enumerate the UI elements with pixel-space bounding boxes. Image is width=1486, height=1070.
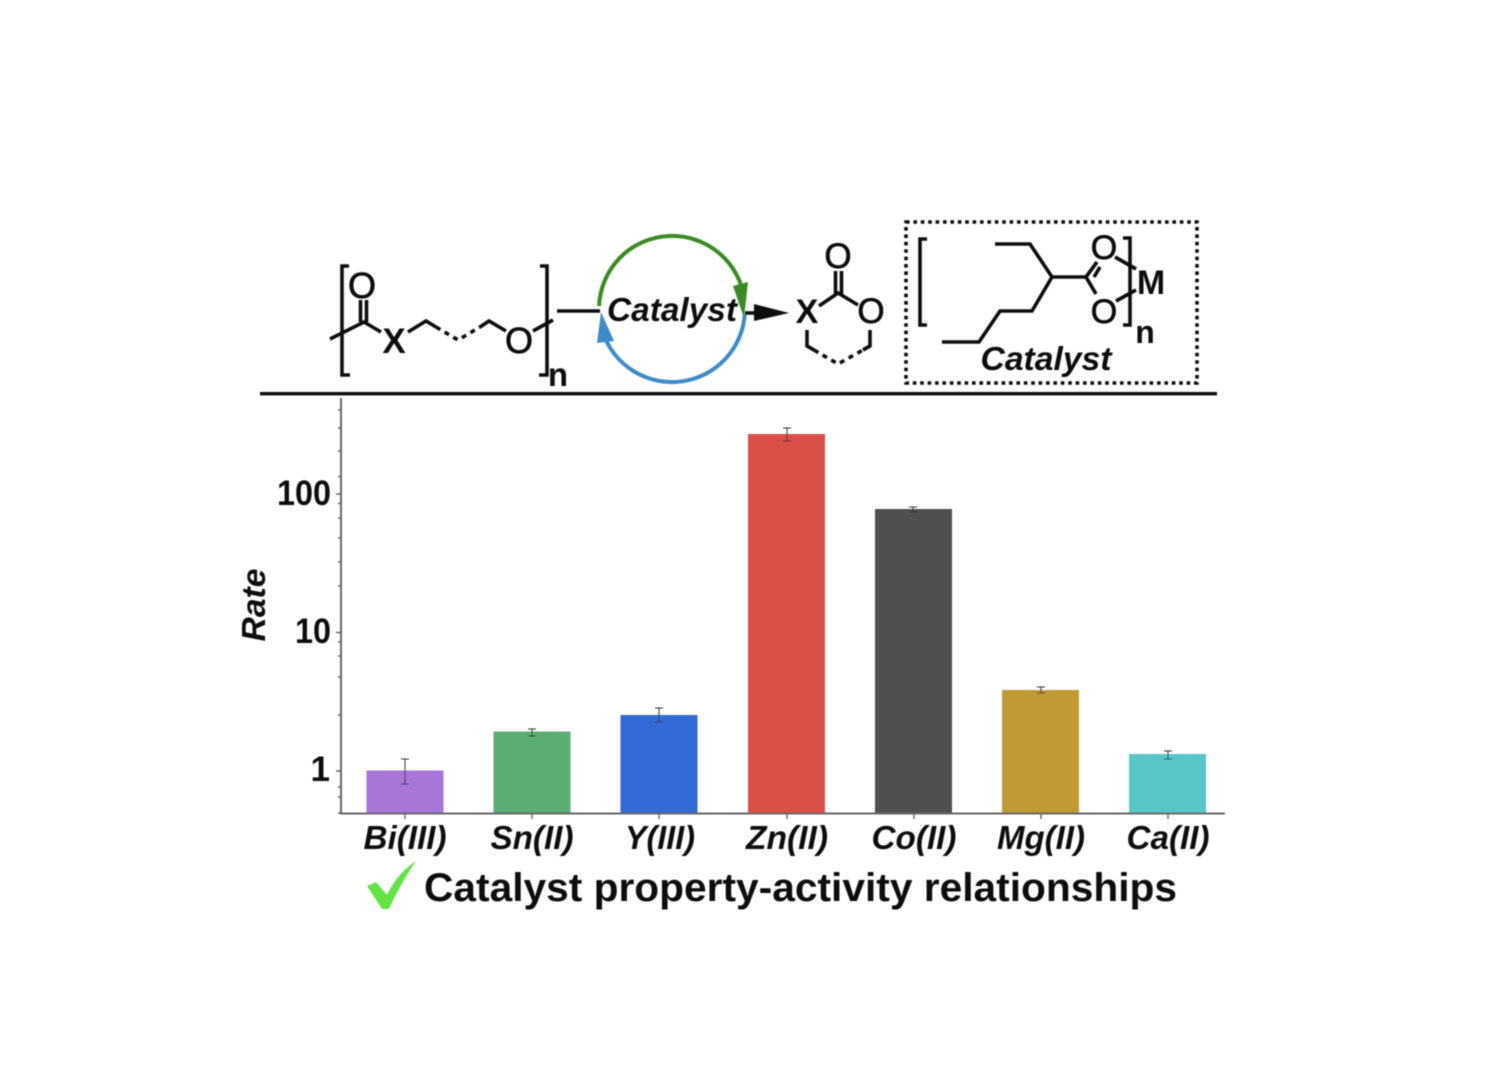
x axis labels: Ca(II) <box>1126 819 1210 856</box>
catalyst structure box: O <box>1091 229 1117 267</box>
x axis labels: Zn(II) <box>745 819 828 856</box>
cyclic product structure: X <box>796 293 819 331</box>
polymer structure: X <box>382 322 406 361</box>
catalyst structure box: M <box>1137 264 1165 302</box>
x axis labels: Mg(II) <box>997 819 1085 856</box>
catalyst structure box <box>906 222 1197 383</box>
bottom caption: Catalyst property-activity relationships <box>424 866 1177 910</box>
bar: Zn(II) <box>748 428 825 813</box>
bar chart <box>235 398 1225 856</box>
y axis title: Rate <box>235 568 272 642</box>
catalyst structure box: O <box>1091 293 1117 331</box>
cyclic product structure <box>796 237 885 364</box>
bar: Bi(III) <box>366 759 444 814</box>
catalyst label: Catalyst <box>607 291 739 328</box>
reaction arrow <box>745 311 760 315</box>
y axis labels: 1 <box>311 750 330 789</box>
catalyst structure box: n <box>1135 314 1155 350</box>
polymer structure <box>330 265 568 393</box>
x axis labels <box>364 819 1210 856</box>
bar: Co(II) <box>875 507 952 813</box>
x axis labels: Sn(II) <box>490 819 574 856</box>
bar: Ca(II) <box>1129 751 1206 813</box>
divider <box>260 392 1217 395</box>
axes and ticks <box>336 398 1225 819</box>
x axis labels: Bi(III) <box>364 819 447 856</box>
y axis labels: 10 <box>295 612 331 651</box>
y axis labels: 100 <box>277 474 331 513</box>
cyclic product structure: O <box>857 292 885 331</box>
cyclic product structure: O <box>824 237 852 276</box>
catalytic cycle arrows <box>557 236 789 382</box>
catalyst structure box: Catalyst <box>980 340 1114 377</box>
x axis labels: Co(II) <box>872 819 957 856</box>
polymer structure: n <box>548 356 568 393</box>
polymer structure: O <box>348 265 376 306</box>
x axis labels: Y(III) <box>625 819 695 856</box>
bar: Y(III) <box>620 708 698 813</box>
icon: green check mark <box>367 861 416 909</box>
polymer structure: O <box>505 320 533 361</box>
bar: Sn(II) <box>494 729 570 814</box>
y axis labels <box>277 474 331 789</box>
bar: Mg(II) <box>1002 687 1079 813</box>
